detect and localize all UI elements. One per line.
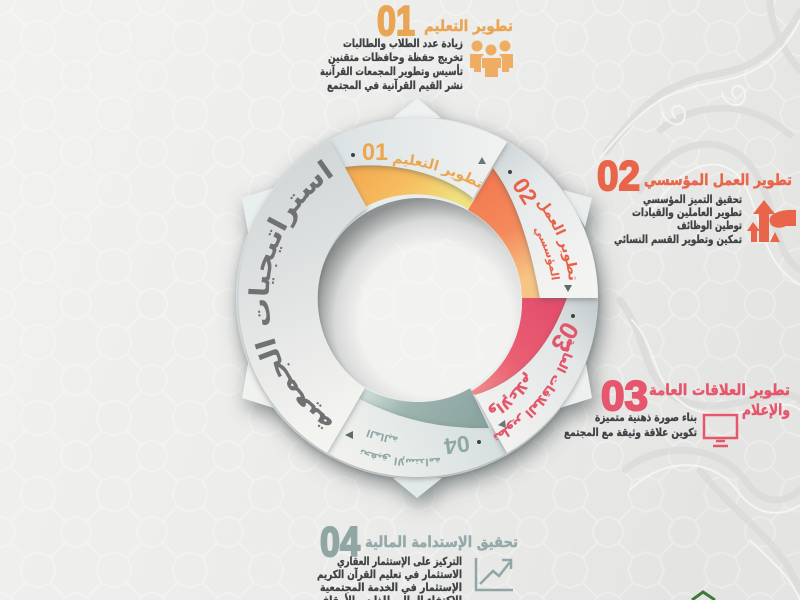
strip 02 shape: [493, 142, 598, 298]
list 02: تطوير العاملين والقيادات: [632, 206, 742, 219]
label 02 line 2: المؤسسي: [533, 228, 560, 280]
heading 03 line 2: والإعلام: [742, 401, 790, 419]
list 04: [317, 555, 462, 600]
segment 04: [326, 398, 508, 482]
band: yellow: [345, 165, 473, 210]
background ornament: [600, 0, 800, 600]
star backing with six points: [236, 98, 598, 498]
number 04: 04: [442, 430, 471, 460]
icon: growth chart: [476, 558, 513, 590]
label 04 outer: تحقيق الإستدامة: [360, 450, 440, 466]
diagram: strategy ring: [226, 97, 616, 515]
list 03: بناء صورة ذهنية متميزة: [595, 411, 697, 424]
band: red: [470, 298, 567, 395]
block 03: public relations: [564, 372, 790, 446]
segment 01: [330, 116, 508, 202]
number 03 large: 03: [601, 372, 648, 419]
label 01: تطوير التعليم: [392, 154, 482, 188]
list 03: تكوين علاقة وثيقة مع المجتمع: [564, 426, 697, 439]
list 01: تخريج حفظة وحافظات متقنين: [328, 51, 463, 64]
list 01: زيادة عدد الطلاب والطالبات: [343, 37, 463, 50]
number 03: 03: [545, 317, 585, 357]
list 01: تأسيس وتطوير المجمعات القرآنية: [320, 64, 463, 78]
number 01: 01: [362, 139, 388, 166]
dot 04: [477, 440, 481, 444]
block 04: financial sustainability: [317, 518, 518, 600]
central hole: [317, 198, 521, 402]
dot 02: [508, 170, 512, 174]
block 02: institutional work: [597, 152, 796, 246]
icon: monitor: [704, 415, 737, 446]
left segment shape: [238, 140, 367, 453]
icon: people: [470, 40, 513, 77]
label 04 inner: المالية: [366, 430, 398, 442]
triangle 02: [564, 285, 572, 292]
left title segment: [236, 140, 369, 456]
icon: rising arrows and hand: [747, 200, 796, 242]
number 02: 02: [507, 173, 543, 209]
list 03: [564, 411, 697, 439]
heading 01: تطوير التعليم: [424, 17, 513, 35]
band: teal: [356, 385, 490, 430]
band: orange: [468, 168, 540, 298]
dot 01: [351, 153, 355, 157]
list 01: [320, 37, 463, 92]
triangle 04: [345, 431, 353, 439]
list 02: [614, 193, 742, 246]
block 01: education: [320, 0, 513, 92]
list 02: توطين الوظائف: [677, 219, 742, 232]
strip 01 shape: [330, 118, 507, 198]
heading 04: تحقيق الإستدامة المالية: [365, 533, 518, 551]
list 02: تحقيق التميز المؤسسي: [643, 193, 742, 206]
dot 03: [571, 314, 575, 318]
list 04: الإستثمار في الخدمة المجتمعية: [320, 581, 462, 594]
list 04: الاستثمار في تعليم القرآن الكريم: [317, 567, 462, 581]
list 04: التركيز على الإستثمار العقاري: [337, 555, 462, 568]
hole pattern overlay: [356, 236, 500, 380]
number 02 large: 02: [597, 152, 640, 199]
list 01: نشر القيم القرآنية في المجتمع: [327, 78, 463, 92]
segment 03: [474, 298, 600, 456]
logo fragment: [692, 592, 715, 600]
triangle 03: [498, 420, 506, 428]
label 03 inner: والإعلام: [488, 371, 528, 414]
list 02: تمكين وتطوير القسم النسائي: [614, 233, 742, 246]
strip 04 shape: [327, 398, 507, 477]
triangle 01: [478, 157, 486, 164]
label 02 line 1: تطوير العمل: [536, 202, 578, 280]
ring title: استراتيجيات الجمعية: [248, 159, 333, 430]
segment 02: [491, 142, 600, 303]
strip 03 shape: [475, 298, 598, 453]
label 03 outer: تطوير العلاقات العامة: [494, 338, 574, 440]
number 04 large: 04: [320, 518, 361, 565]
